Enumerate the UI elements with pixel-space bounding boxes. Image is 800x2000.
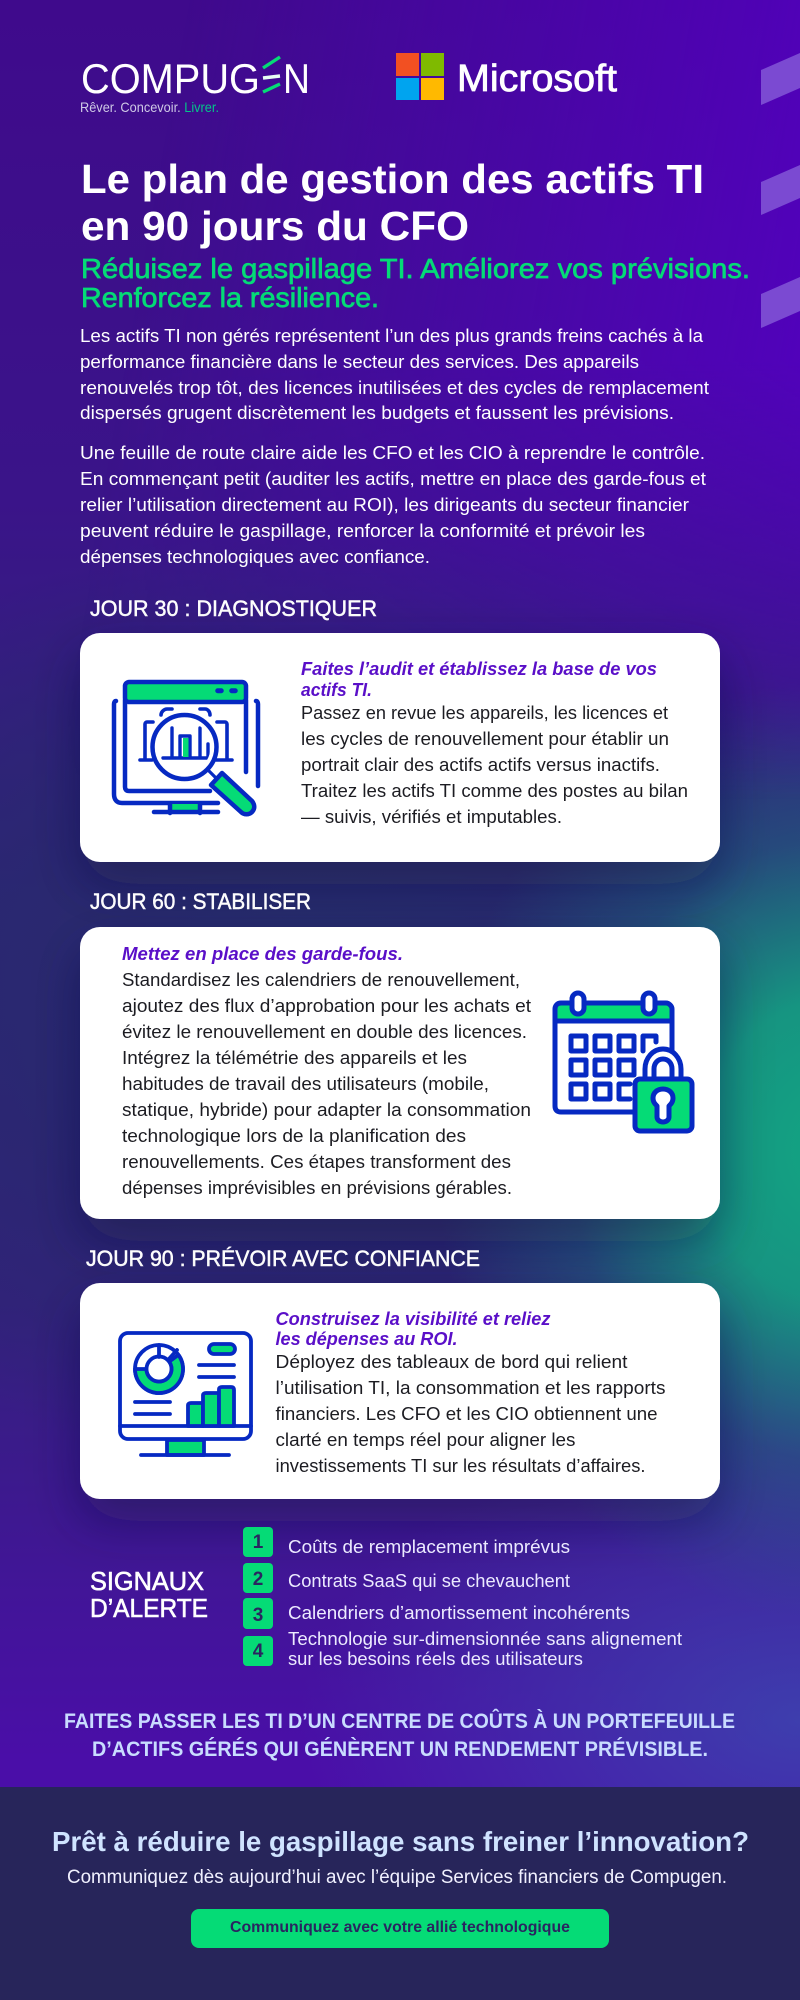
number badges: [243, 1527, 273, 1666]
title: en 90 jours du CFO: [81, 203, 469, 249]
heading: signaux d'alerte: SIGNAUX: [90, 1566, 204, 1596]
subtitle: Renforcez la résilience.: [81, 282, 379, 313]
icon: dashboard monitor: [120, 1333, 251, 1455]
logo: Compugen: COMPUG: [81, 55, 260, 102]
text: garde-fous: habitudes de travail des utilisateurs (mobile,: [122, 1073, 489, 1094]
number badges: 1: [253, 1532, 264, 1553]
text: garde-fous: Intégrez la télémétrie des appareils et les: [122, 1047, 467, 1068]
statement: FAITES PASSER LES TI D’UN CENTRE DE COÛTS À UN PORTEFEUILLE: [64, 1709, 735, 1733]
heading: jour 90: JOUR 90 : PRÉVOIR AVEC CONFIANCE: [86, 1246, 480, 1271]
panel: jour 30: [80, 633, 720, 862]
logo: Compugen: E: [263, 55, 281, 102]
text: garde-fous: Standardisez les calendriers de renouvellement,: [122, 969, 520, 990]
text: faites l'audit: les cycles de renouvellement pour établir un: [301, 728, 669, 749]
heading: jour 30: JOUR 30 : DIAGNOSTIQUER: [90, 596, 377, 621]
text: garde-fous: [122, 943, 531, 1198]
text: garde-fous: dépenses imprévisibles en prévisions gérables.: [122, 1177, 512, 1198]
alert items: Calendriers d’amortissement incohérents: [288, 1602, 630, 1623]
footer panel: [0, 1787, 800, 2000]
subtitle: Réduisez le gaspillage TI. Améliorez vos prévisions.: [81, 253, 750, 284]
intro paragraph 1: dispersés grugent discrètement les budgets et faussent les prévisions.: [80, 402, 674, 423]
text: visibilité: les dépenses au ROI.: [276, 1328, 458, 1349]
alert items: [288, 1536, 682, 1669]
intro paragraph 1: renouvelés trop tôt, des licences inutilisées et des cycles de remplacement: [80, 377, 709, 398]
text: garde-fous: évitez le renouvellement en double des licences.: [122, 1021, 527, 1042]
text: garde-fous: renouvellements. Ces étapes transforment des: [122, 1151, 511, 1172]
logo: Microsoft: Microsoft: [457, 58, 617, 100]
text: visibilité: investissements TI sur les résultats d’affaires.: [276, 1455, 646, 1476]
panel: jour 60: [80, 927, 720, 1219]
background top-right tint: [230, 0, 800, 742]
logo: Microsoft: [396, 53, 617, 100]
number badges: 4: [253, 1641, 264, 1662]
text: visibilité: Construisez la visibilité et reliez: [276, 1308, 551, 1329]
footer subtext: Communiquez dès aujourd’hui avec l’équipe Services financiers de Compugen.: [67, 1867, 727, 1888]
icon: audit monitor with magnifier: [114, 682, 258, 814]
text: faites l'audit: [301, 658, 688, 827]
text: garde-fous: ajoutez des flux d’approbation pour les achats et: [122, 995, 531, 1016]
intro paragraph 2: Une feuille de route claire aide les CFO et les CIO à reprendre le contrôle.: [80, 442, 705, 463]
logo: Compugen: [80, 55, 310, 115]
statement: D’ACTIFS GÉRÉS QUI GÉNÈRENT UN RENDEMENT PRÉVISIBLE.: [92, 1738, 708, 1761]
intro paragraph 1: [80, 325, 709, 423]
logo: Compugen: N: [283, 55, 310, 102]
decorative chevrons right edge: [761, 53, 800, 328]
title: Le plan de gestion des actifs TI: [81, 156, 704, 202]
intro paragraph 1: performance financière dans le secteur des services. Des appareils: [80, 351, 639, 372]
number badges: 3: [253, 1605, 263, 1626]
logo: Compugen: Rêver. Concevoir. Livrer.: [80, 99, 219, 115]
icon: calendar with padlock: [555, 993, 692, 1131]
intro paragraph 2: [80, 442, 706, 567]
title: [81, 156, 704, 249]
alert items: sur les besoins réels des utilisateurs: [288, 1648, 583, 1669]
panel: jour 90: [80, 1283, 720, 1499]
button: Communiquez avec votre allié technologique: [230, 1919, 570, 1936]
text: visibilité: Déployez des tableaux de bord qui relient: [276, 1351, 628, 1372]
text: garde-fous: technologique lors de la planification des: [122, 1125, 466, 1146]
text: faites l'audit: Passez en revue les appareils, les licences et: [301, 702, 668, 723]
number badges: 2: [253, 1569, 263, 1590]
subtitle: [81, 253, 750, 313]
alert items: Contrats SaaS qui se chevauchent: [288, 1570, 570, 1591]
heading: signaux d'alerte: D’ALERTE: [90, 1593, 208, 1623]
intro paragraph 2: dépenses technologiques avec confiance.: [80, 546, 430, 567]
text: faites l'audit: actifs TI.: [301, 679, 372, 700]
intro paragraph 2: relier l’utilisation directement au ROI), les dirigeants du secteur financier: [80, 494, 689, 515]
statement: [64, 1709, 735, 1761]
intro paragraph 1: Les actifs TI non gérés représentent l’un des plus grands freins cachés à la: [80, 325, 704, 346]
alert items: Coûts de remplacement imprévus: [288, 1536, 570, 1557]
button: [191, 1909, 609, 1948]
text: faites l'audit: — suivis, vérifiés et imputables.: [301, 806, 562, 827]
section: signaux d'alerte: [90, 1527, 682, 1669]
alert items: Technologie sur-dimensionnée sans alignement: [288, 1628, 682, 1649]
heading: jour 60: JOUR 60 : STABILISER: [90, 889, 311, 914]
text: garde-fous: Mettez en place des garde-fous.: [122, 943, 403, 964]
text: visibilité: [276, 1308, 666, 1476]
intro paragraph 2: peuvent réduire le gaspillage, renforcer la conformité et prévoir les: [80, 520, 645, 541]
intro paragraph 2: En commençant petit (auditer les actifs, mettre en place des garde-fous et: [80, 468, 706, 489]
text: faites l'audit: Faites l’audit et établissez la base de vos: [301, 658, 657, 679]
text: visibilité: clarté en temps réel pour aligner les: [276, 1429, 576, 1450]
text: faites l'audit: Traitez les actifs TI comme des postes au bilan: [301, 780, 688, 801]
text: visibilité: financiers. Les CFO et les CIO obtiennent une: [276, 1403, 658, 1424]
text: faites l'audit: portrait clair des actifs actifs versus inactifs.: [301, 754, 660, 775]
footer heading: Prêt à réduire le gaspillage sans freiner l’innovation?: [52, 1826, 749, 1857]
text: visibilité: l’utilisation TI, la consommation et les rapports: [276, 1377, 666, 1398]
text: garde-fous: statique, hybride) pour adapter la consommation: [122, 1099, 531, 1120]
heading: signaux d'alerte: [90, 1566, 208, 1623]
